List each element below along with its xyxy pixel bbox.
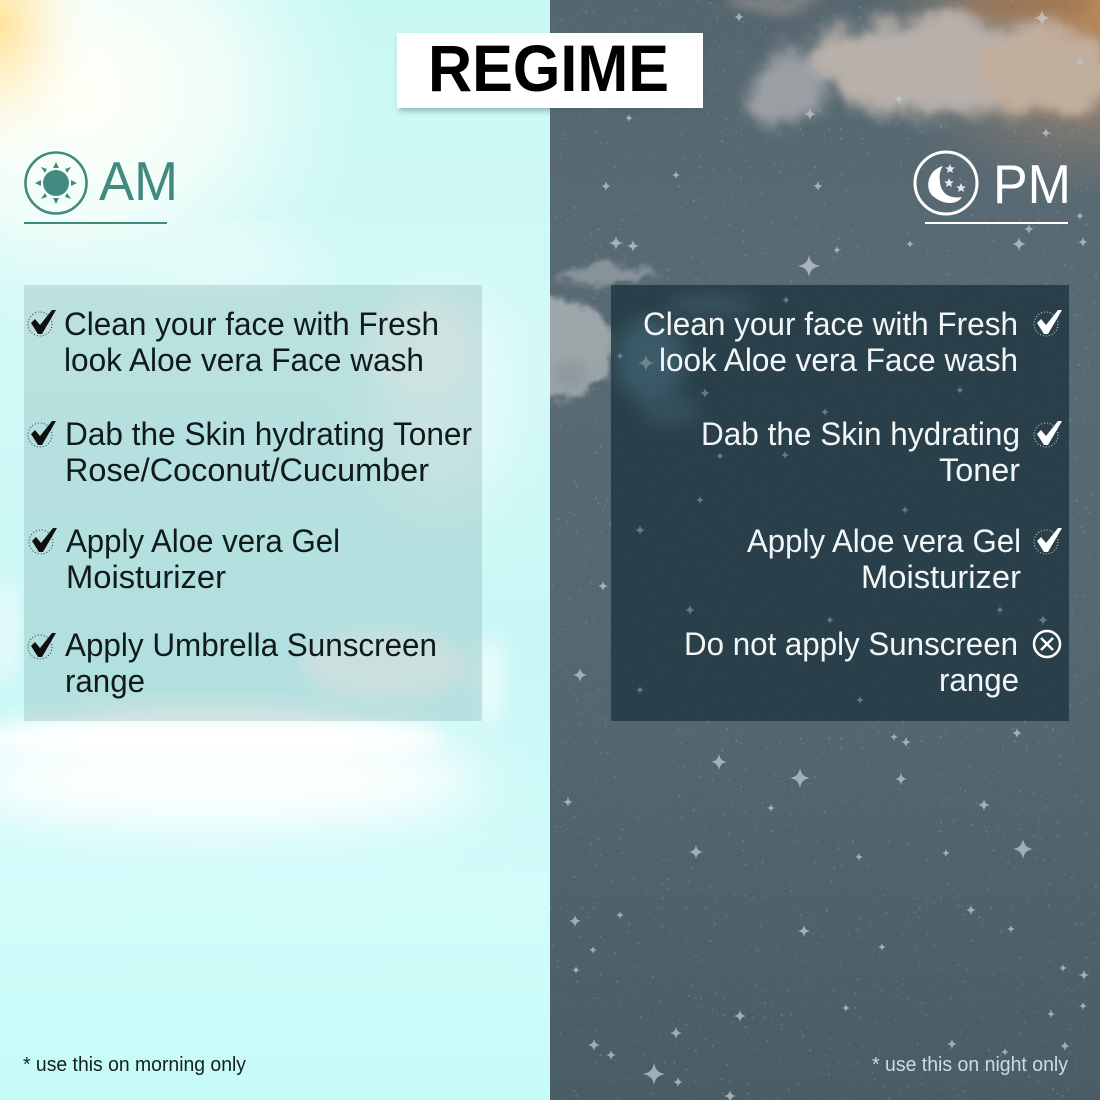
panel: AM sky background <box>0 0 550 1100</box>
icon: sun <box>26 152 86 214</box>
panel: AM steps <box>24 285 482 721</box>
step 1 AM: look Aloe vera Face wash <box>64 342 424 378</box>
panel: PM steps <box>611 285 1069 721</box>
step 1 PM: look Aloe vera Face wash <box>659 342 1018 378</box>
step 2 AM: Dab the Skin hydrating Toner <box>65 416 472 452</box>
step 3 AM: Apply Aloe vera Gel <box>66 523 340 559</box>
footnote: AM: * use this on morning only <box>23 1054 246 1076</box>
star field <box>550 0 1100 1100</box>
step 2 PM <box>701 416 1062 488</box>
step 4 AM: Apply Umbrella Sunscreen <box>65 627 437 663</box>
PM heading <box>915 152 1071 224</box>
step 1 AM: Clean your face with Fresh <box>64 306 439 342</box>
step 1 AM <box>28 306 439 378</box>
step 4 PM: Do not apply Sunscreen <box>684 626 1018 662</box>
step 1 PM: Clean your face with Fresh <box>643 306 1018 342</box>
step 4 AM <box>28 627 437 699</box>
step 4 PM: range <box>939 662 1019 698</box>
step 1 PM <box>643 306 1062 378</box>
step 3 PM: Apply Aloe vera Gel <box>747 523 1021 559</box>
step 2 AM: Rose/Coconut/Cucumber <box>65 452 429 488</box>
icon: moon and stars <box>915 152 977 214</box>
AM heading: AM <box>99 150 178 212</box>
step 2 PM: Toner <box>939 452 1020 488</box>
step 4 AM: range <box>65 663 145 699</box>
step 3 PM: Moisturizer <box>861 559 1021 595</box>
step 3 AM: Moisturizer <box>66 559 226 595</box>
PM heading: PM <box>993 153 1071 215</box>
panel: PM night sky background <box>540 0 1100 1100</box>
step 2 PM: Dab the Skin hydrating <box>701 416 1020 452</box>
step 3 PM <box>747 523 1062 595</box>
title: REGIME <box>428 31 669 105</box>
step 3 AM <box>29 523 340 595</box>
footnote: PM: * use this on night only <box>872 1054 1068 1076</box>
AM heading <box>24 150 178 224</box>
step 2 AM <box>28 416 472 488</box>
step 4 PM <box>684 626 1060 698</box>
